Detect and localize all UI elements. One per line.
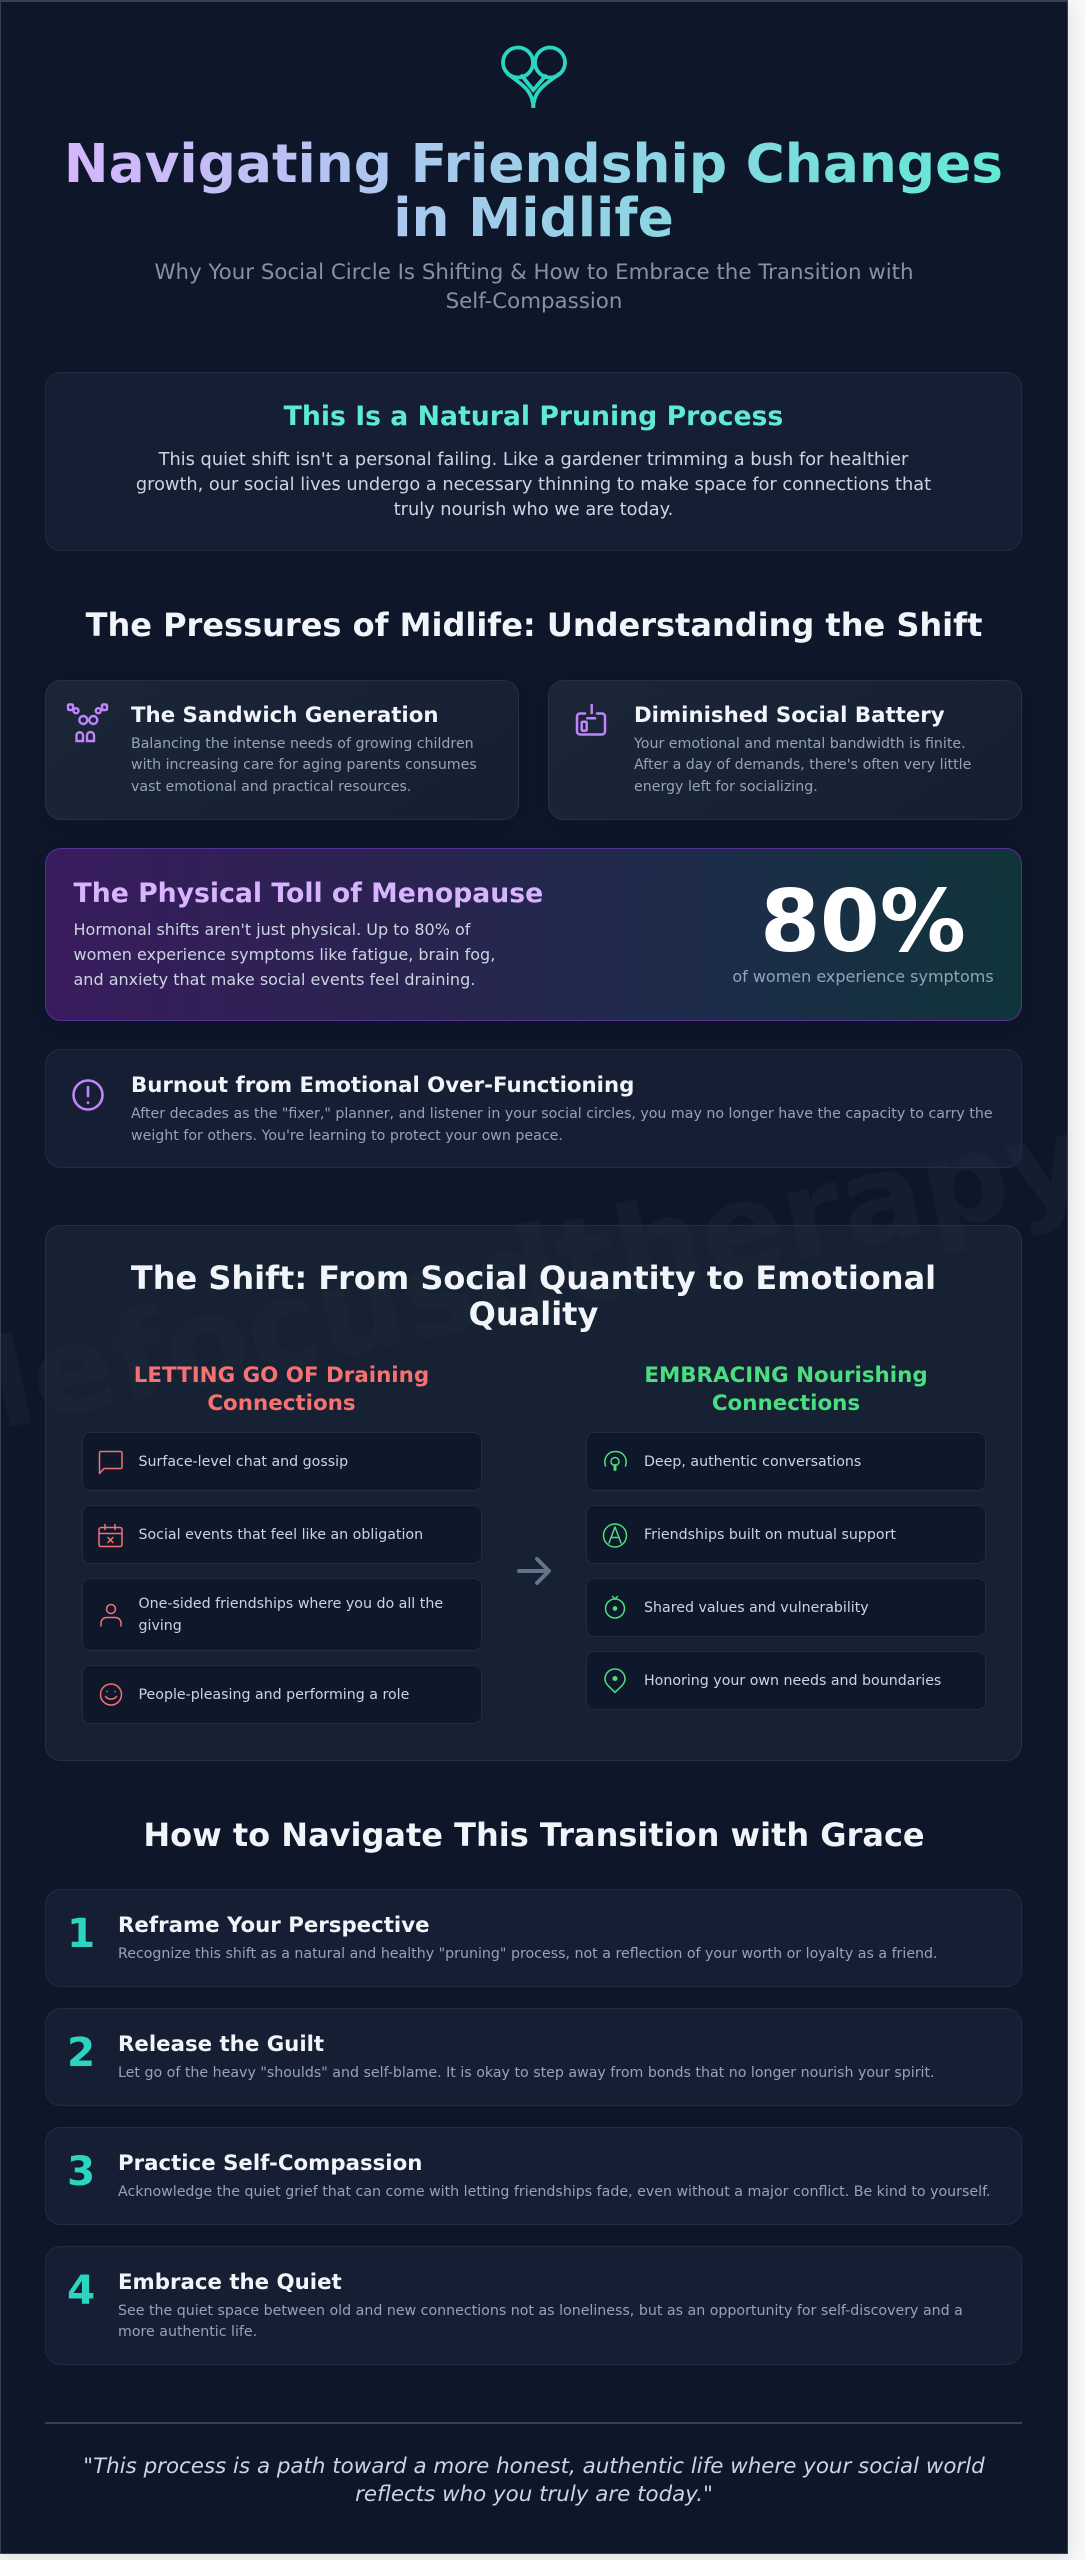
item: deep conversations (586, 1432, 986, 1491)
item: people-pleasing: People-pleasing and performing a role (138, 1687, 409, 1703)
step 4 text: See the quiet space between old and new connections not as loneliness, but as an opportunity for self-discovery and a (118, 2303, 963, 2319)
step 3 text: Acknowledge the quiet grief that can come with letting friendships fade, even without a major conflict. Be kind to yourself. (118, 2184, 991, 2200)
text: social battery: energy left for socializing. (634, 779, 818, 795)
text: menopause body (74, 920, 495, 989)
text: menopause body: women experience symptoms like fatigue, brain fog, (74, 945, 495, 964)
heading: embracing: Connections (712, 1391, 860, 1416)
step 1 (45, 1889, 1022, 1987)
text: sandwich generation (131, 736, 477, 795)
step 3 title: Practice Self-Compassion (118, 2151, 422, 2176)
heading: letting go: LETTING GO OF Draining (134, 1363, 429, 1388)
item: surface-level chat (82, 1432, 482, 1491)
step 1 text: Recognize this shift as a natural and healthy "pruning" process, not a reflection of your worth or loyalty as a friend. (118, 1946, 938, 1962)
arrow (517, 1556, 551, 1585)
number 3: 3 (67, 2146, 95, 2194)
title (45, 137, 1022, 245)
text: pruning body: growth, our social lives undergo a necessary thinning to make space for connections that (136, 475, 931, 495)
item: people-pleasing (82, 1665, 482, 1724)
number 1: 1 (67, 1908, 95, 1956)
text: sandwich generation: Balancing the intense needs of growing children (131, 736, 474, 752)
text: social battery (634, 736, 971, 795)
heading: the shift (131, 1259, 936, 1333)
item: social obligations: Social events that feel like an obligation (138, 1527, 423, 1543)
text: burnout: After decades as the "fixer," planner, and listener in your social circles, you may no longer have the capacity to carry the (131, 1106, 993, 1122)
item: shared values (586, 1578, 986, 1637)
icon: two hearts logo (501, 46, 567, 108)
icon: sandwich generation people (66, 703, 108, 742)
text: pruning body: truly nourish who we are today. (394, 500, 673, 520)
number 4: 4 (67, 2266, 95, 2314)
text: pruning body: This quiet shift isn't a personal failing. Like a gardener trimming a bush for healthier (159, 450, 908, 470)
heading: how to navigate: How to Navigate This Transition with Grace (143, 1816, 925, 1854)
item: mutual support (586, 1505, 986, 1564)
text: sandwich generation: vast emotional and practical resources. (131, 779, 411, 795)
panel: physical toll of menopause (45, 848, 1022, 1021)
heading: embracing: EMBRACING Nourishing (644, 1363, 928, 1388)
closing quote (83, 2454, 985, 2507)
text: social battery: Your emotional and mental bandwidth is finite. (634, 736, 966, 752)
heading: letting go (134, 1363, 429, 1416)
text: menopause body: Hormonal shifts aren't just physical. Up to 80% of (74, 920, 470, 939)
step 3 (45, 2127, 1022, 2225)
stat: 80 percent: 80% (760, 872, 966, 972)
heading: burnout: Burnout from Emotional Over-Functioning (131, 1073, 634, 1098)
panel: natural pruning intro (45, 372, 1022, 551)
heading: menopause: The Physical Toll of Menopause (74, 878, 543, 908)
title: Navigating Friendship Changes (64, 132, 1003, 195)
card: diminished social battery (548, 680, 1022, 820)
item: own needs and boundaries (586, 1651, 986, 1710)
stat label: of women experience symptoms (732, 966, 994, 986)
subtitle (154, 260, 914, 314)
card: burnout (45, 1049, 1022, 1168)
step 4 text (118, 2303, 963, 2340)
item: mutual support: Friendships built on mutual support (644, 1527, 896, 1543)
heading: embracing (644, 1363, 928, 1416)
item: social obligations (82, 1505, 482, 1564)
heading: the shift: Quality (469, 1295, 598, 1333)
item: own needs and boundaries: Honoring your own needs and boundaries (644, 1673, 941, 1689)
panel: the shift (45, 1225, 1022, 1761)
icon: battery (576, 704, 606, 736)
closing quote: reflects who you truly are today." (355, 2482, 713, 2507)
text: social battery: After a day of demands, there's often very little (634, 757, 971, 773)
step 4 title: Embrace the Quiet (118, 2270, 342, 2295)
step 2 text: Let go of the heavy "shoulds" and self-blame. It is okay to step away from bonds that no longer nourish your spirit. (118, 2065, 935, 2081)
item: one-sided friendships: One-sided friendships where you do all the (138, 1596, 443, 1612)
heading: social battery: Diminished Social Battery (634, 703, 945, 728)
item: surface-level chat: Surface-level chat and gossip (138, 1454, 348, 1470)
heading: letting go: Connections (207, 1391, 356, 1416)
step 1 title: Reframe Your Perspective (118, 1913, 430, 1938)
step 4 (45, 2246, 1022, 2365)
text: pruning body (136, 450, 931, 520)
text: menopause body: and anxiety that make social events feel draining. (74, 970, 475, 989)
card: sandwich generation (45, 680, 519, 820)
heading: the shift: The Shift: From Social Quantity to Emotional (131, 1259, 936, 1297)
step 2 (45, 2008, 1022, 2106)
item: shared values: Shared values and vulnerability (644, 1600, 869, 1616)
text: burnout: weight for others. You're learning to protect your own peace. (131, 1128, 563, 1144)
step 2 title: Release the Guilt (118, 2032, 324, 2057)
title: in Midlife (393, 186, 674, 249)
text: burnout (131, 1106, 993, 1144)
heading: sandwich generation: The Sandwich Generation (131, 703, 439, 728)
heading: pressures of midlife: The Pressures of Midlife: Understanding the Shift (86, 606, 982, 644)
text: sandwich generation: with increasing care for aging parents consumes (131, 757, 477, 773)
item: one-sided friendships: giving (138, 1618, 182, 1634)
icon: alert circle (72, 1079, 104, 1111)
item: one-sided friendships (82, 1578, 482, 1651)
number 2: 2 (67, 2028, 95, 2076)
heading: pruning: This Is a Natural Pruning Process (284, 401, 783, 432)
subtitle: Self-Compassion (446, 289, 622, 314)
item: deep conversations: Deep, authentic conversations (644, 1454, 861, 1470)
subtitle: Why Your Social Circle Is Shifting & How to Embrace the Transition with (154, 260, 914, 285)
step 4 text: more authentic life. (118, 2324, 257, 2340)
closing quote: "This process is a path toward a more honest, authentic life where your social world (83, 2454, 985, 2479)
